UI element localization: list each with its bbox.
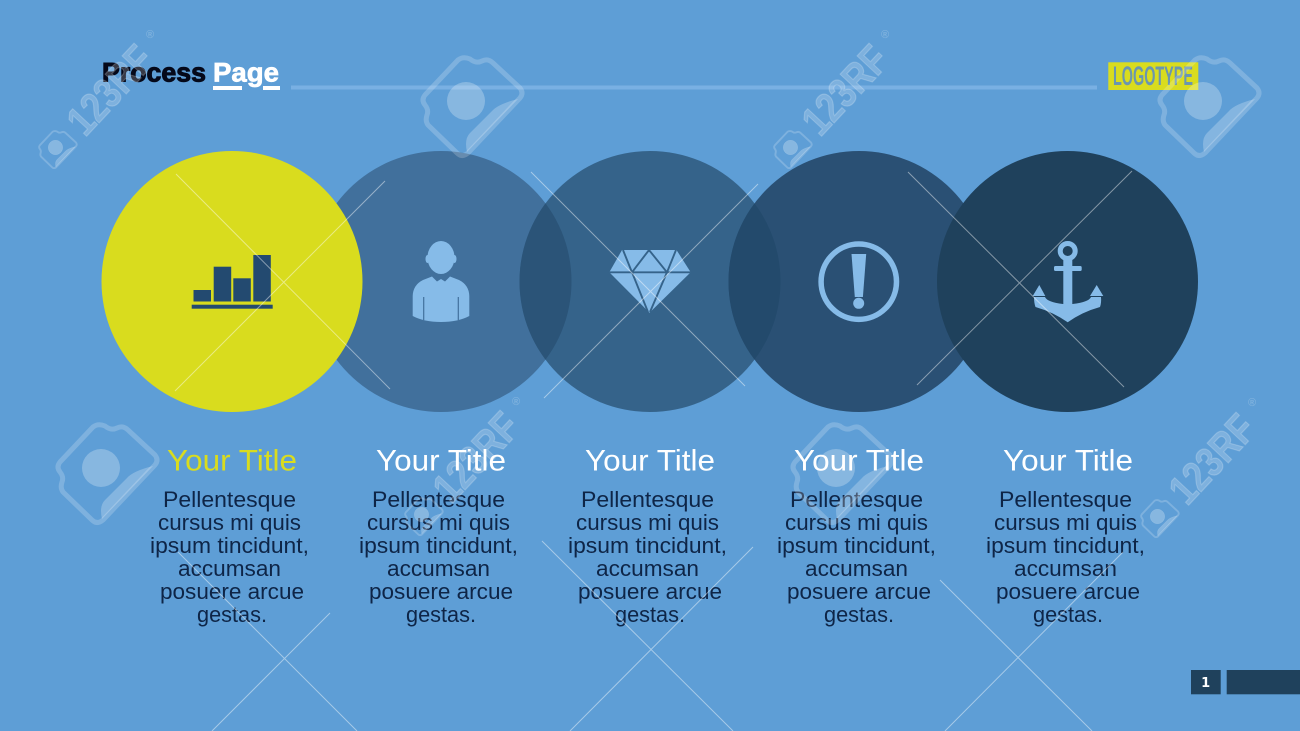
column 2 text: gestas. — [406, 602, 476, 627]
circle 5 — [937, 151, 1198, 412]
watermark: 123RF logos: 123RF — [57, 36, 163, 144]
column 2 text: ipsum tincidunt, — [359, 533, 518, 558]
column 4 text: gestas. — [824, 602, 894, 627]
column 3 — [568, 444, 727, 627]
logotype: LOGOTYPE — [1113, 61, 1193, 91]
column 1 title: Your Title — [167, 444, 297, 478]
column 3 title: Your Title — [585, 444, 715, 478]
watermark: 123RF logos: ® — [881, 29, 889, 41]
watermark: large eggs — [58, 58, 1259, 522]
circle 1 — [102, 151, 362, 412]
column 5 text: accumsan — [1014, 556, 1117, 581]
column 2 text: accumsan — [387, 556, 490, 581]
column 5 text: Pellentesque — [999, 487, 1132, 512]
column 2 text: Pellentesque — [372, 487, 505, 512]
header — [102, 58, 1198, 91]
column 5 text: cursus mi quis — [994, 510, 1137, 535]
icon: anchor — [1033, 244, 1103, 322]
column 5 text — [986, 487, 1145, 627]
logotype — [1108, 61, 1198, 91]
column 2 text: posuere arcue — [369, 579, 513, 604]
column 5 text: gestas. — [1033, 602, 1103, 627]
circle 3 — [520, 151, 780, 412]
column 1 text: gestas. — [197, 602, 267, 627]
icon: exclamation — [821, 244, 896, 319]
column 3 text: cursus mi quis — [576, 510, 719, 535]
title accent word: Page — [213, 58, 279, 88]
page number — [1191, 670, 1300, 694]
column 4 — [777, 444, 936, 627]
column 1 text: posuere arcue — [160, 579, 304, 604]
icon: diamond — [609, 250, 691, 313]
column 3 text: accumsan — [596, 556, 699, 581]
title: Process — [102, 58, 206, 88]
column 4 text: accumsan — [805, 556, 908, 581]
column 1 text: accumsan — [178, 556, 281, 581]
watermark: 123RF logos: ® — [146, 29, 154, 41]
circle chain — [102, 151, 1198, 412]
column 4 text: posuere arcue — [787, 579, 931, 604]
column 3 text: Pellentesque — [581, 487, 714, 512]
watermark: 123RF logos: ® — [1248, 397, 1256, 409]
column 2 title: Your Title — [376, 444, 506, 478]
column 5 title: Your Title — [1003, 444, 1133, 478]
column 5 text: posuere arcue — [996, 579, 1140, 604]
watermark: 123RF logos: 123RF — [423, 403, 529, 511]
column 2 — [359, 444, 518, 627]
column 3 text: posuere arcue — [578, 579, 722, 604]
circle 4 — [728, 151, 990, 412]
column 2 text — [359, 487, 518, 627]
column 4 title: Your Title — [794, 444, 924, 478]
column 4 text: Pellentesque — [790, 487, 923, 512]
column 2 text: cursus mi quis — [367, 510, 510, 535]
column 3 text: gestas. — [615, 602, 685, 627]
watermark: 123RF logos: ® — [512, 396, 520, 408]
column 4 text: ipsum tincidunt, — [777, 533, 936, 558]
column 1 text: cursus mi quis — [158, 510, 301, 535]
circle 2 — [310, 151, 572, 412]
column 4 text — [777, 487, 936, 627]
watermark: 123RF logos — [39, 29, 1265, 537]
column 1 text — [150, 487, 309, 627]
column 1 text: Pellentesque — [163, 487, 296, 512]
column 3 text — [568, 487, 727, 627]
overlap 2-3 — [520, 204, 572, 360]
page number: 1 — [1201, 676, 1210, 691]
column 1 — [150, 444, 309, 627]
column 5 — [986, 444, 1145, 627]
overlap 3-4 — [728, 204, 780, 359]
watermark: 123RF logos: 123RF — [792, 36, 898, 144]
icon: bar chart — [192, 255, 273, 309]
watermark: 123RF logos: 123RF — [1159, 405, 1265, 513]
icon: person — [413, 241, 469, 322]
column 3 text: ipsum tincidunt, — [568, 533, 727, 558]
column 5 text: ipsum tincidunt, — [986, 533, 1145, 558]
watermark: crossing lines — [175, 171, 1132, 731]
column 4 text: cursus mi quis — [785, 510, 928, 535]
column 1 text: ipsum tincidunt, — [150, 533, 309, 558]
